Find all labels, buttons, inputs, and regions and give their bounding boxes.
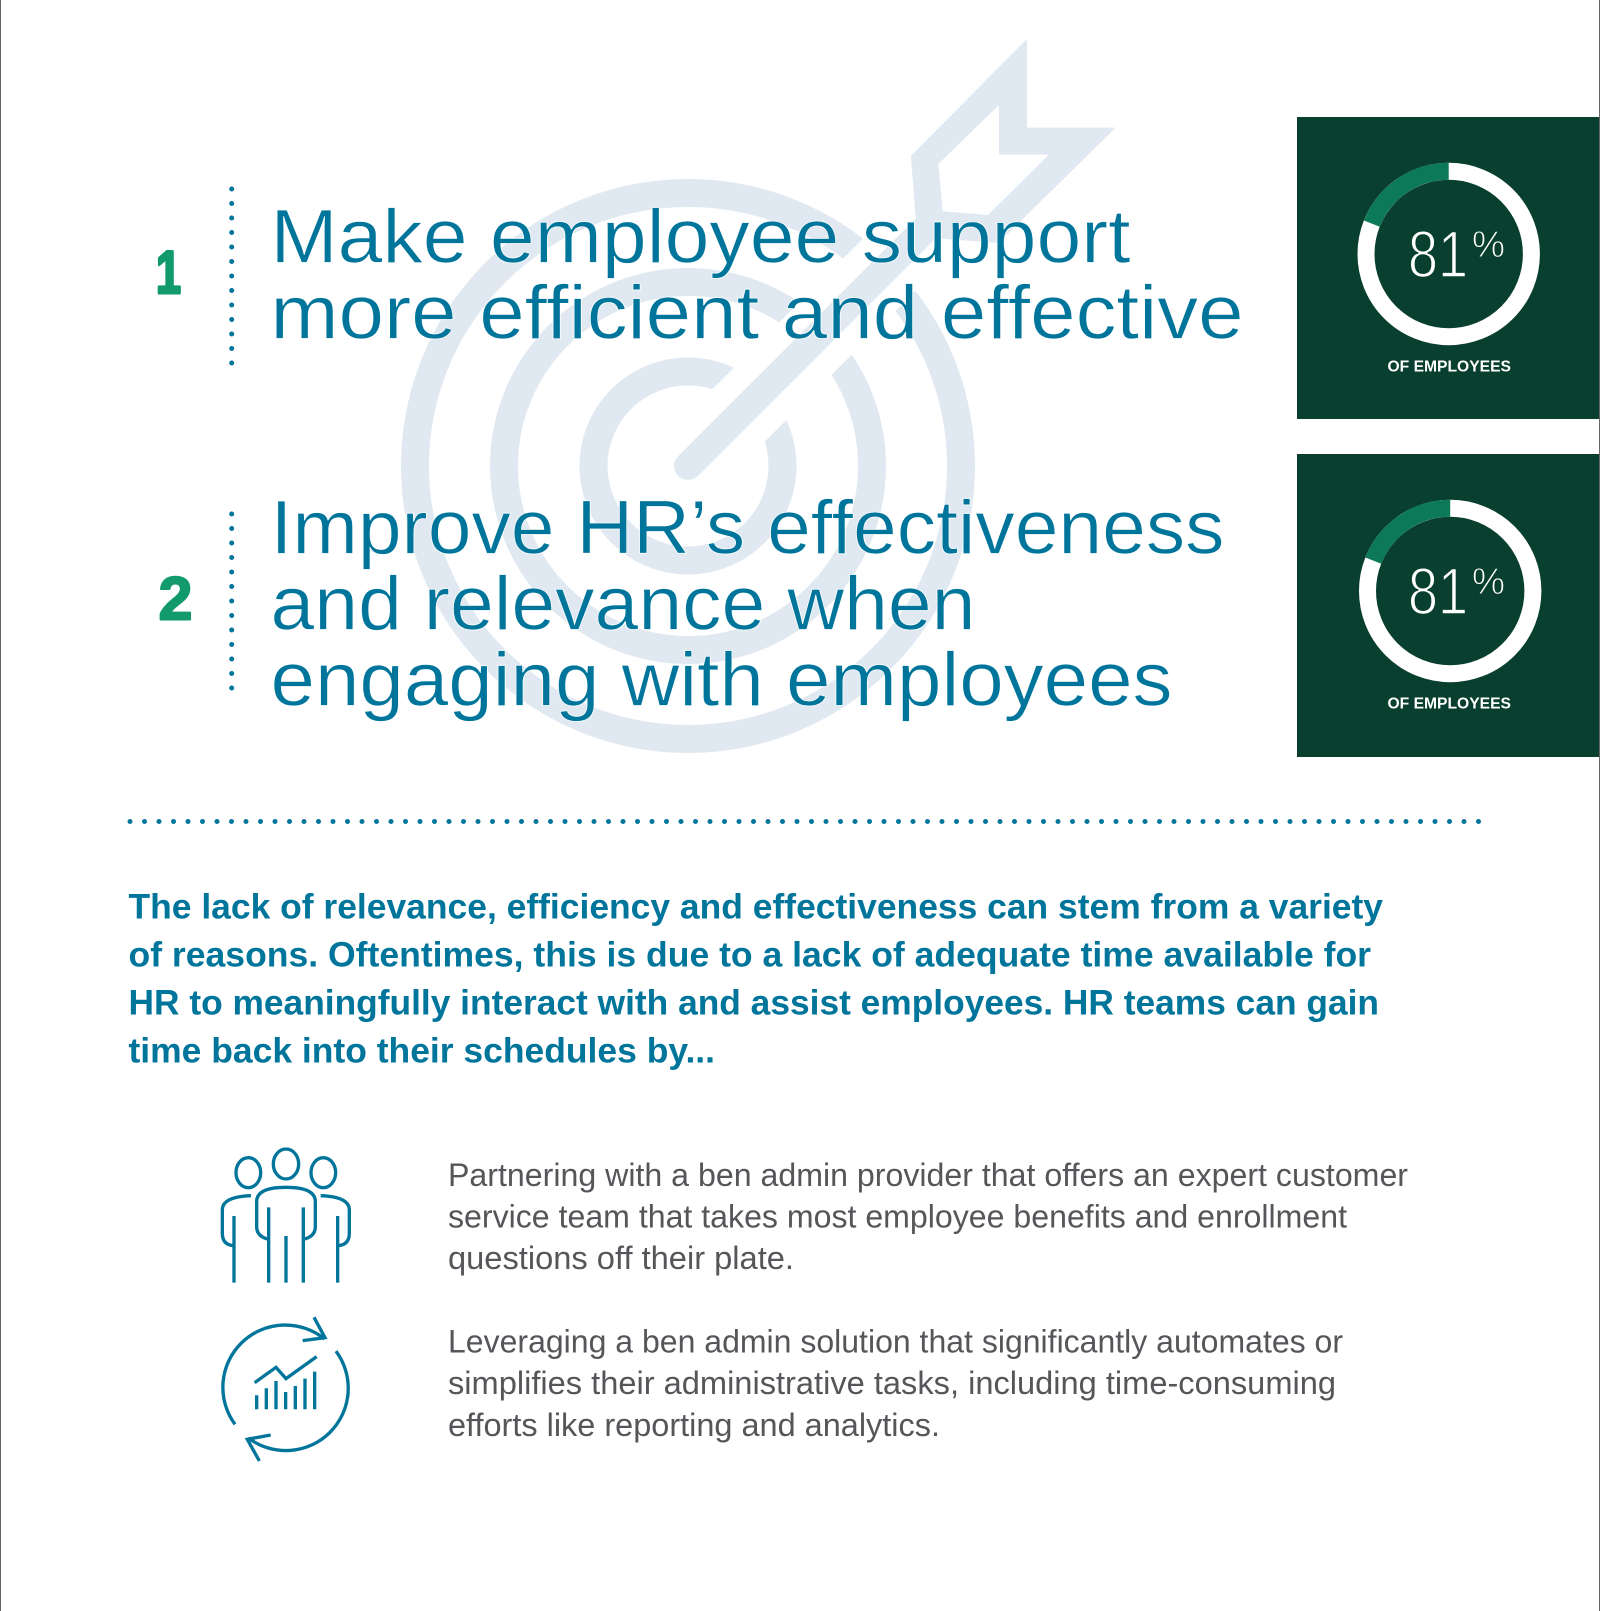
intro paragraph: HR to meaningfully interact with and assist employees. HR teams can gain xyxy=(128,983,1379,1022)
heading 2 xyxy=(270,486,1224,722)
heading 2: Improve HR’s effectiveness xyxy=(270,486,1224,570)
heading 2: engaging with employees xyxy=(270,638,1172,722)
text: partnering: service team that takes most employee benefits and enrollment xyxy=(448,1199,1347,1235)
panel: 81% stat one: 81 xyxy=(1408,217,1468,291)
panel: 81% stat two: OF EMPLOYEES xyxy=(1388,696,1511,713)
icon: background target with arrow xyxy=(415,39,1116,739)
dotted divider 1 xyxy=(229,189,234,365)
donut chart one xyxy=(1366,171,1531,337)
text: partnering: Partnering with a ben admin provider that offers an expert customer xyxy=(448,1157,1408,1193)
intro paragraph: time back into their schedules by... xyxy=(128,1031,715,1070)
heading 1: Make employee support xyxy=(270,194,1130,280)
heading 1 xyxy=(270,194,1244,356)
panel: 81% stat two: 81 xyxy=(1408,554,1468,628)
panel: 81% stat two: % xyxy=(1472,561,1505,602)
panel: 81% stat one: OF EMPLOYEES xyxy=(1388,359,1511,376)
icon: cycle with growth chart xyxy=(223,1317,348,1461)
panel: 81% stat one: % xyxy=(1472,224,1505,265)
intro paragraph: of reasons. Oftentimes, this is due to a lack of adequate time available for xyxy=(128,935,1371,974)
panel: 81% stat two xyxy=(1297,454,1599,757)
panel: 81% stat one xyxy=(1297,117,1599,419)
icon: three people xyxy=(222,1149,349,1283)
text: leveraging: simplifies their administrative tasks, including time-consuming xyxy=(448,1365,1336,1401)
intro paragraph: The lack of relevance, efficiency and effectiveness can stem from a variety xyxy=(128,887,1384,926)
donut chart two xyxy=(1368,508,1533,674)
dotted divider 2 xyxy=(229,514,234,691)
heading 2: and relevance when xyxy=(270,562,976,646)
text: partnering: questions off their plate. xyxy=(448,1240,794,1276)
number 2: 2 xyxy=(158,564,192,632)
heading 1: more efficient and effective xyxy=(270,270,1244,356)
intro paragraph xyxy=(128,887,1384,1070)
text: partnering xyxy=(448,1157,1408,1276)
text: leveraging xyxy=(448,1324,1343,1443)
text: leveraging: Leveraging a ben admin solution that significantly automates or xyxy=(448,1324,1343,1360)
text: leveraging: efforts like reporting and analytics. xyxy=(448,1407,940,1443)
number 1: 1 xyxy=(156,239,181,306)
